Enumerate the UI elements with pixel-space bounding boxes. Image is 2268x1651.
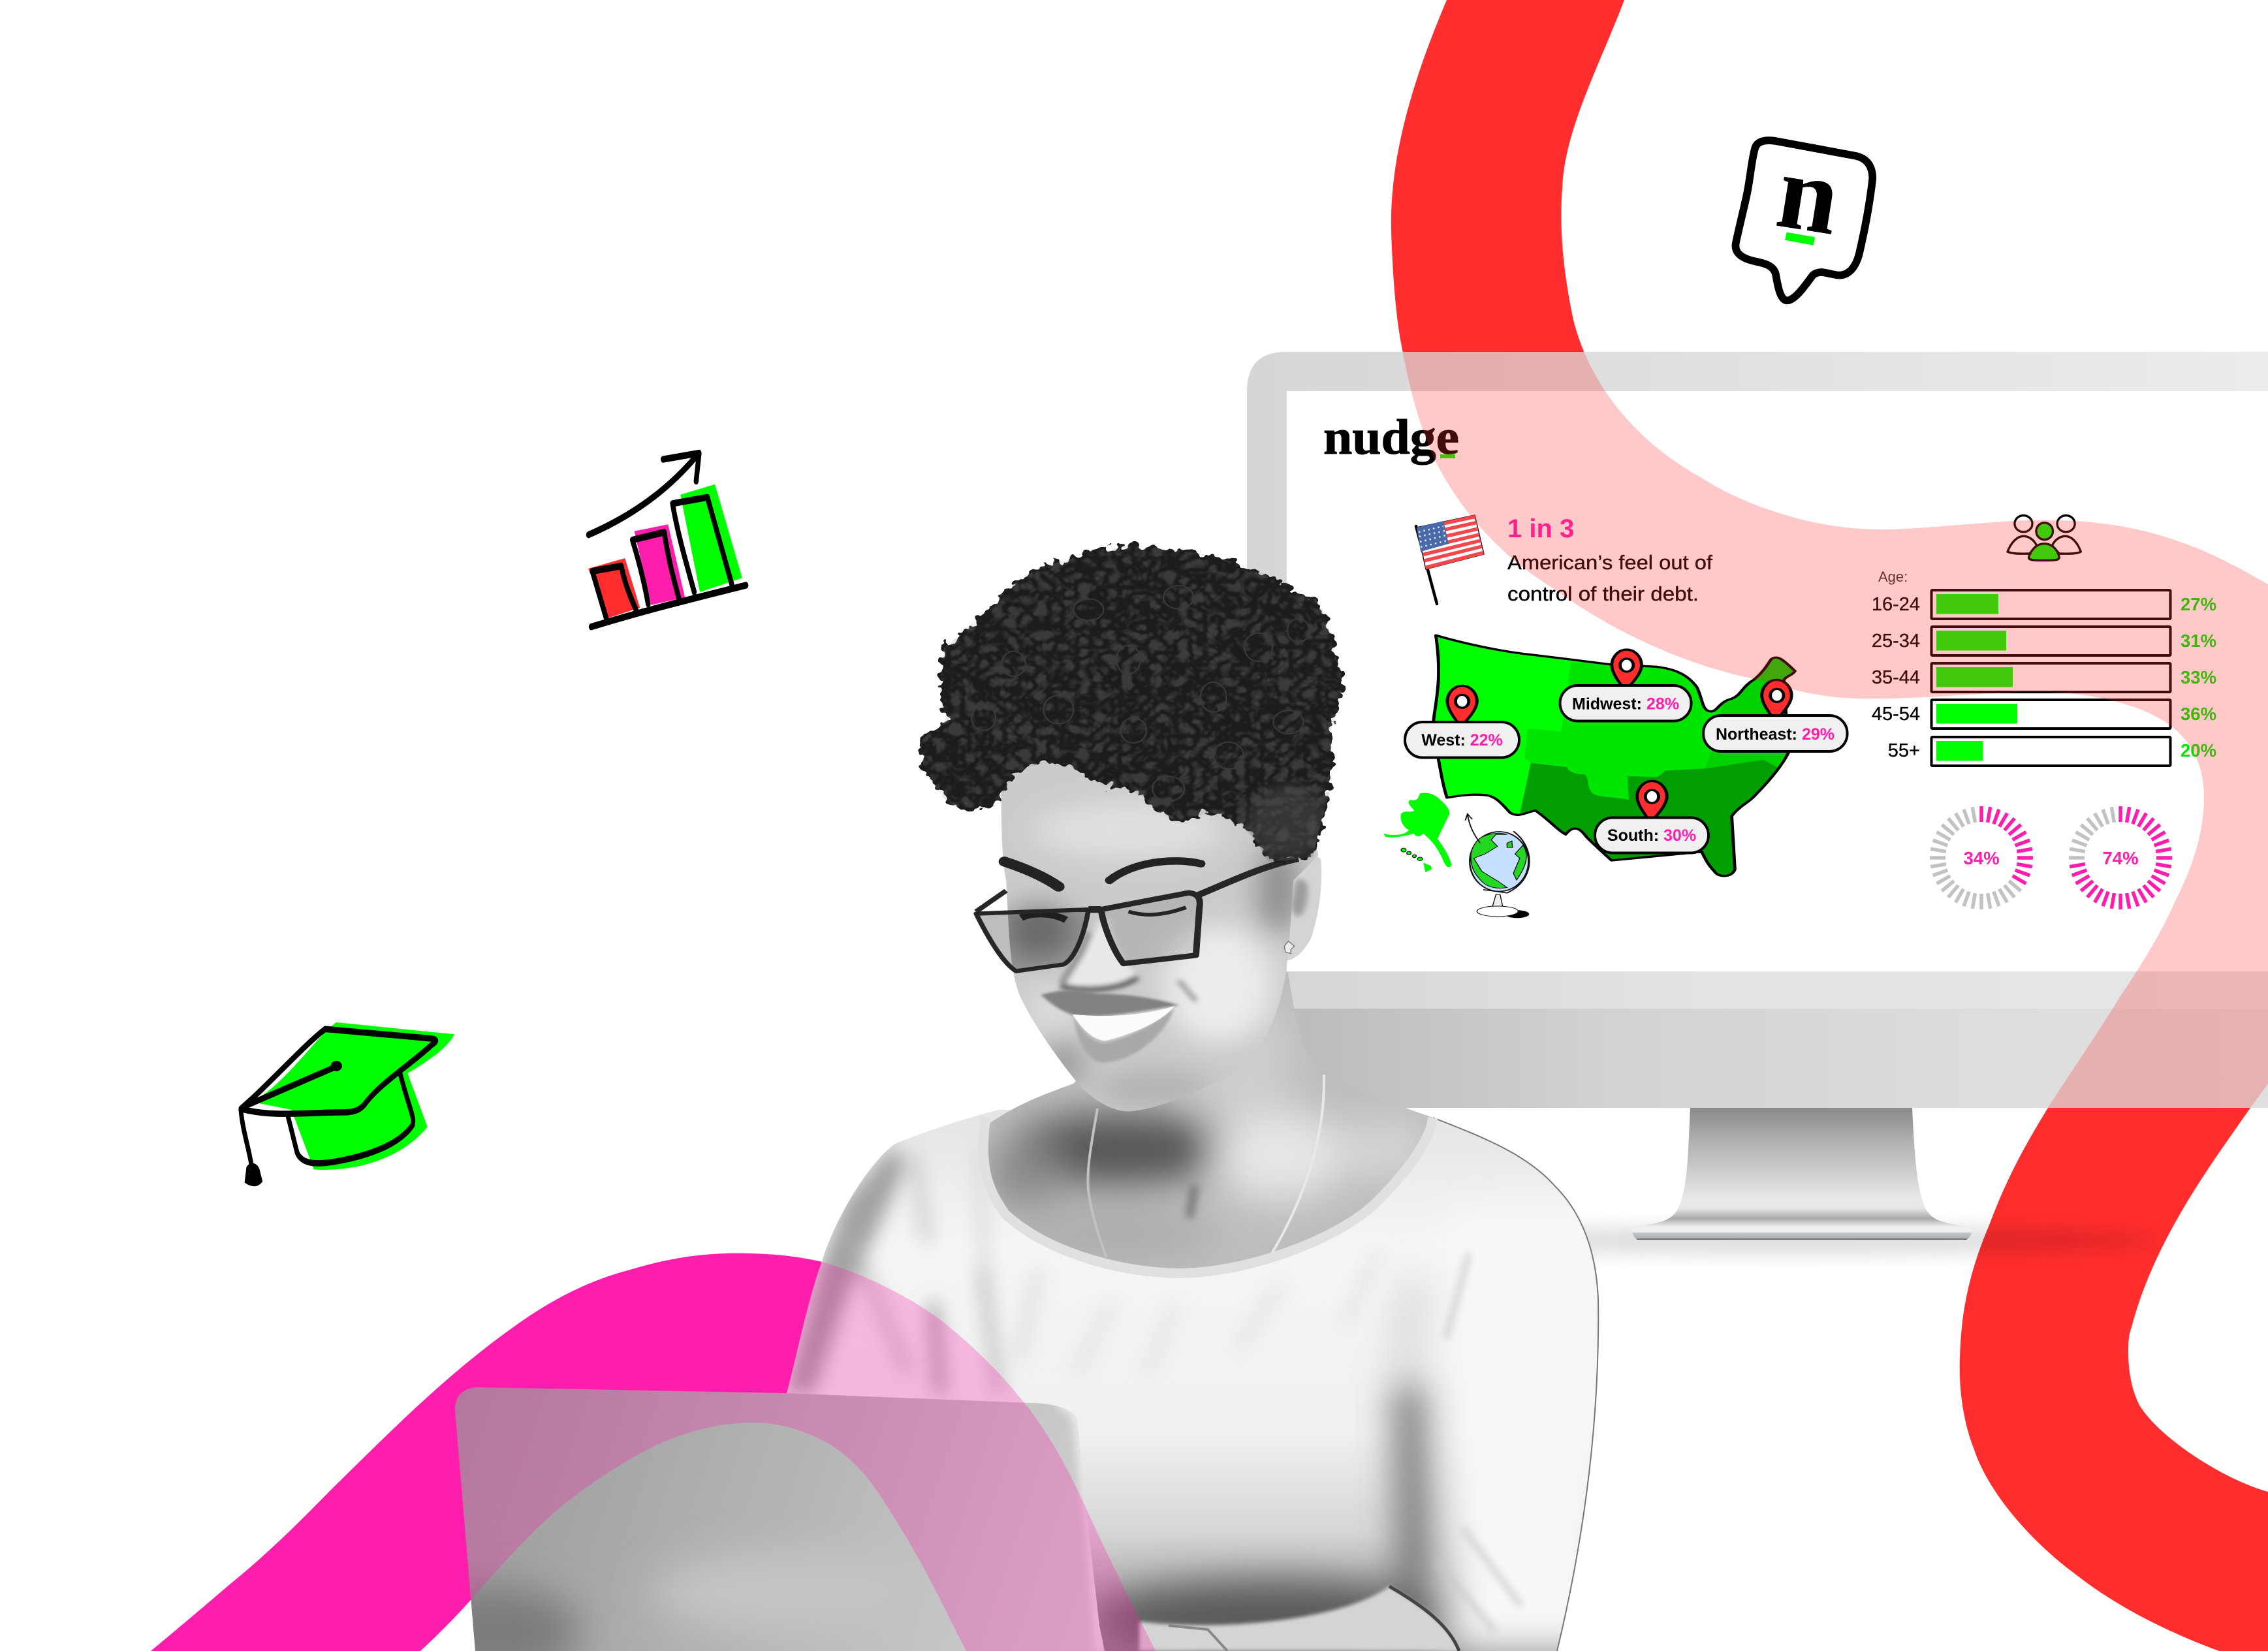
alaska — [1383, 793, 1452, 867]
stat description: American’s feel out of — [1507, 551, 1712, 574]
icon: growth bar chart — [588, 453, 746, 627]
label: midwest — [1560, 685, 1691, 721]
stat number: 1 in 3 — [1507, 514, 1574, 543]
age heading: Age: — [1878, 569, 1908, 585]
bar row 45-54 — [1872, 700, 2216, 729]
bar row 35-44 — [1872, 663, 2216, 692]
icon: people group — [2008, 516, 2081, 560]
necklace — [1088, 1075, 1324, 1260]
icon: nudge speech bubble: n — [1770, 131, 1848, 258]
monitor stand shadow — [1417, 1226, 2161, 1255]
red ribbon — [1391, 0, 2268, 1651]
pink ribbon — [151, 1253, 1156, 1651]
US map with region labels — [1383, 635, 1848, 918]
icon: american flag — [1416, 515, 1484, 604]
forearm — [1139, 1586, 1459, 1651]
bar row 45-54: 36% — [2181, 704, 2216, 724]
bar row 35-44: 33% — [2181, 667, 2216, 687]
eyebrows — [1005, 861, 1201, 887]
stat description: control of their debt. — [1507, 582, 1699, 605]
label: northeast: Northeast: 29% — [1716, 725, 1835, 744]
bar row 45-54: 45-54 — [1872, 704, 1920, 725]
icon: graduation cap — [241, 1022, 454, 1186]
bar row 55+: 20% — [2181, 740, 2216, 761]
label: midwest: Midwest: 28% — [1572, 695, 1679, 713]
label: northeast — [1703, 715, 1848, 751]
label: south — [1595, 817, 1709, 853]
monitor chin lower band — [1247, 1009, 2268, 1108]
bar row 16-24: 16-24 — [1872, 594, 1920, 615]
bar row 25-34: 31% — [2181, 631, 2216, 651]
lips — [1041, 990, 1180, 1063]
monitor — [1247, 352, 2268, 1255]
bar row 25-34 — [1872, 627, 2216, 655]
monitor stand — [1632, 1108, 1972, 1240]
translucent pink ribbon overlay — [151, 1253, 1156, 1651]
glasses — [976, 858, 1299, 971]
monitor chin upper band — [1247, 971, 2268, 1009]
shirt — [751, 1097, 1613, 1651]
radial gauge 74 percent: 74% — [2102, 848, 2139, 868]
laptop — [411, 1384, 1110, 1651]
bar row 55+: 55+ — [1888, 740, 1920, 761]
nudge logo on screen: nudge — [1323, 410, 1459, 465]
earring — [1284, 941, 1295, 954]
eyes — [1021, 907, 1186, 920]
monitor screen — [1287, 391, 2268, 971]
headline stat — [1507, 514, 1712, 605]
icon: nudge speech bubble — [1735, 131, 1872, 300]
ear — [1278, 857, 1321, 961]
label: west: West: 22% — [1421, 731, 1503, 749]
age bar chart — [1872, 569, 2216, 766]
bar row 25-34: 25-34 — [1872, 631, 1920, 652]
face — [976, 743, 1329, 1118]
globe — [1465, 814, 1529, 918]
bar row 55+ — [1888, 737, 2216, 766]
radial gauge 34 percent — [1930, 806, 2033, 909]
monitor bezel — [1247, 352, 2268, 1009]
hawaii — [1401, 848, 1432, 872]
map shapes — [1383, 635, 1795, 918]
label: west — [1405, 722, 1519, 757]
hair — [913, 539, 1353, 868]
radial gauge 74 percent — [2069, 806, 2172, 909]
woman with laptop — [455, 541, 1599, 1651]
label: south: South: 30% — [1607, 826, 1696, 845]
radial gauge 34 percent: 34% — [1963, 848, 2000, 868]
bar row 35-44: 35-44 — [1872, 667, 1920, 688]
bar row 16-24 — [1872, 590, 2216, 619]
curls — [971, 586, 1310, 801]
location pins — [1447, 650, 1791, 823]
shirt collar — [983, 1118, 1433, 1273]
neck and chest — [966, 966, 1449, 1286]
shirt outline — [1433, 1118, 1598, 1651]
teeth — [1073, 1006, 1174, 1041]
translucent ribbon over monitor — [1402, 352, 2268, 1108]
bar row 16-24: 27% — [2181, 594, 2216, 614]
nose — [1061, 918, 1196, 1001]
